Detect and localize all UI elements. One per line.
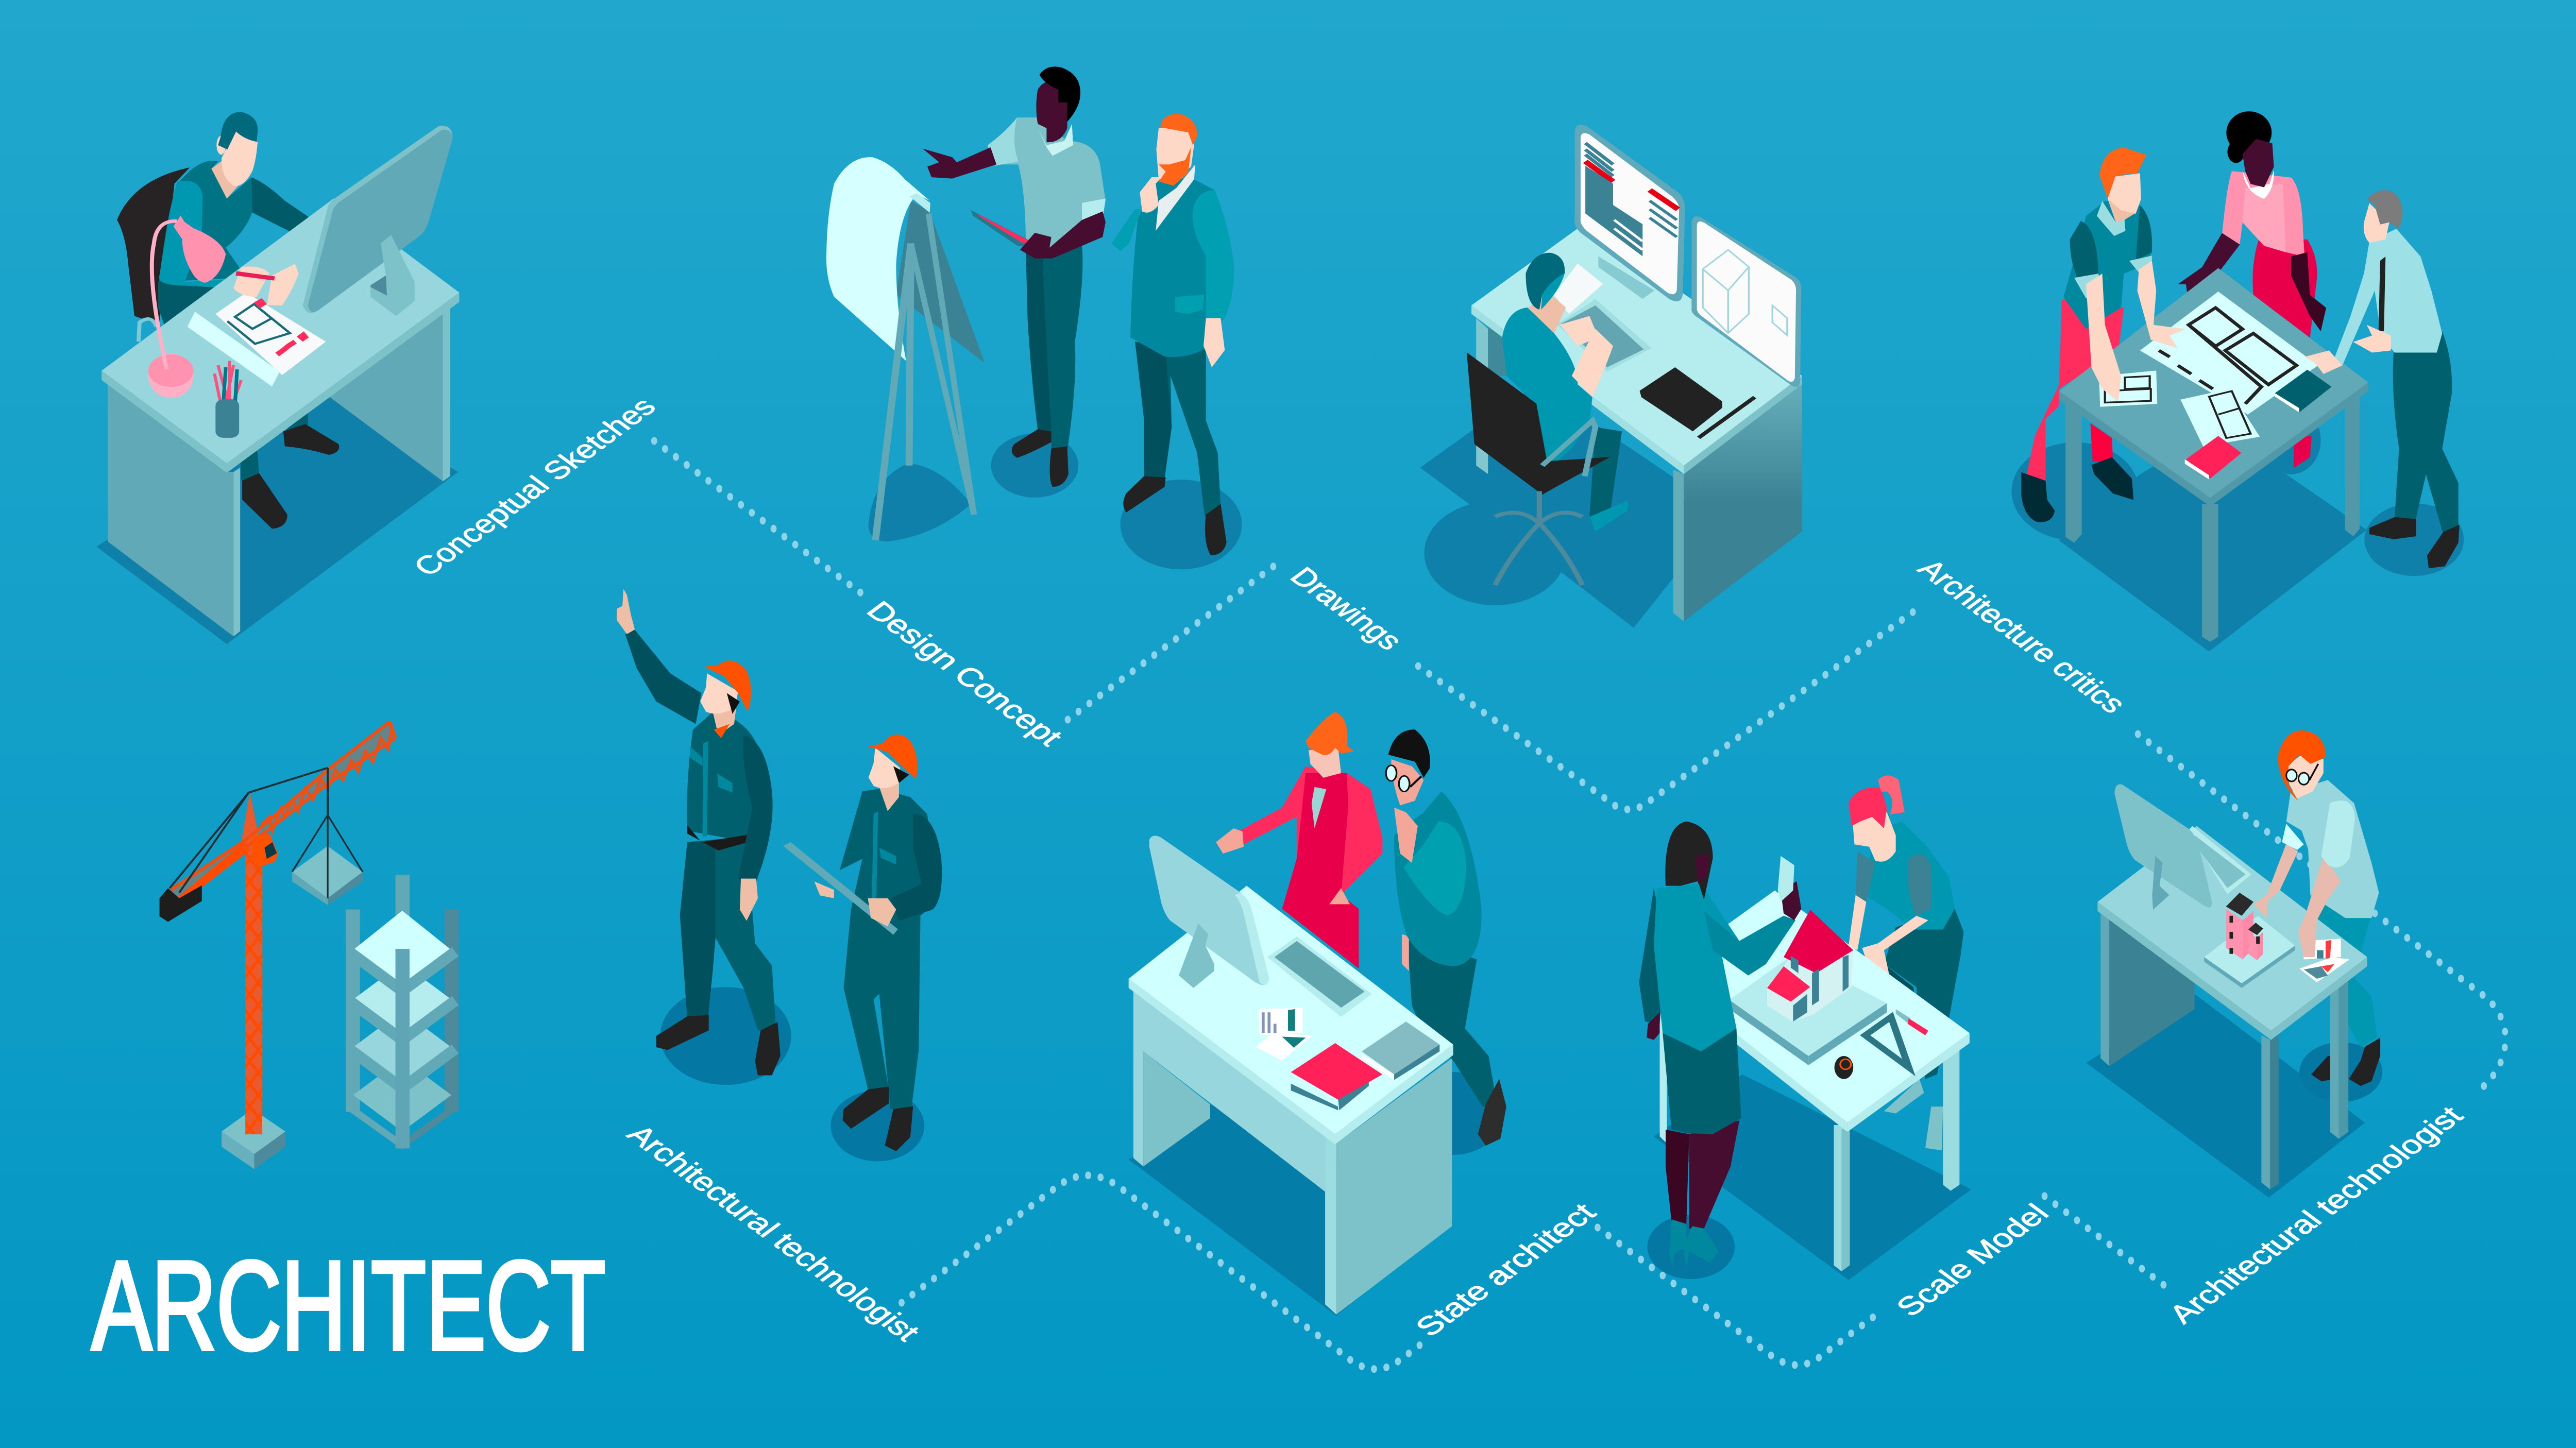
desk top [101,199,459,464]
person: woman with glasses [2253,730,2379,957]
person: bearded man in jacket [1111,114,1234,555]
keyboard [1267,936,1372,1017]
label: Conceptual Sketches: Conceptual Sketches [407,393,663,582]
scene: state architect at desk [1129,712,1506,1316]
scene: design concept at easel and desk [826,66,1802,628]
label: Drawings: Drawings [1283,562,1410,655]
man in red trousers upper body [2063,148,2186,402]
keyboard and monitor [2114,784,2251,910]
table [2059,268,2368,642]
easel [826,157,985,540]
legs and shoes [240,410,339,529]
charts on desk [2299,939,2350,982]
man torso [158,112,313,325]
desk [2097,826,2367,1189]
person: man with glasses [1386,729,1506,1146]
pencil cup [214,361,241,438]
label: Architecture critics: Architecture critics [1911,554,2133,719]
man in red trousers [2021,299,2133,522]
blueprint paper [188,293,326,386]
person: woman from behind with tablet [1639,822,1801,1268]
hands and pen [233,264,299,305]
table [1660,891,1970,1271]
chair [117,167,190,325]
house model on base [1730,910,1887,1065]
documents and books [1256,1008,1439,1110]
label: Scale Model: Scale Model [1889,1199,2056,1322]
woman in pink blouse [2178,111,2326,468]
scene: scale model table [1639,775,1971,1280]
monitor [1149,836,1269,988]
scene: architecture critics around table [2012,111,2464,652]
dotted connector path [654,441,2505,1369]
scene: architectural technologist at model desk [2086,730,2382,1198]
scene: construction crane and workers [160,589,942,1169]
title: ARCHITECT [92,1235,605,1376]
floor plans and books [2099,292,2332,480]
scene: man sketching at desk [96,112,459,644]
desk [1129,886,1453,1315]
tower model on base [2204,893,2295,988]
desk with two monitors [1471,125,1802,621]
desk lamp [148,216,226,398]
label: Design Concept: Design Concept [859,596,1070,751]
worker with rolled plan [783,735,942,1161]
label: Architectural technologist left: Architectural technologist [620,1120,926,1347]
drafting tools [1835,1009,1928,1079]
person: girl with ponytail [1849,775,1963,1079]
worker pointing up [617,589,791,1085]
building frame [346,875,459,1150]
tower crane [160,722,396,1169]
monitor [303,126,452,316]
label: State architect: State architect [1409,1198,1603,1342]
person at computer on office chair [1467,253,1628,585]
woman lower body [2310,895,2380,1086]
label: Architectural technologist right: Architectural technologist [2162,1101,2470,1329]
person: man pointing with tablet [923,66,1106,487]
man in light shirt with tie [2304,190,2460,568]
hanging concrete slab [292,815,363,905]
person: woman in red suit [1216,712,1382,968]
